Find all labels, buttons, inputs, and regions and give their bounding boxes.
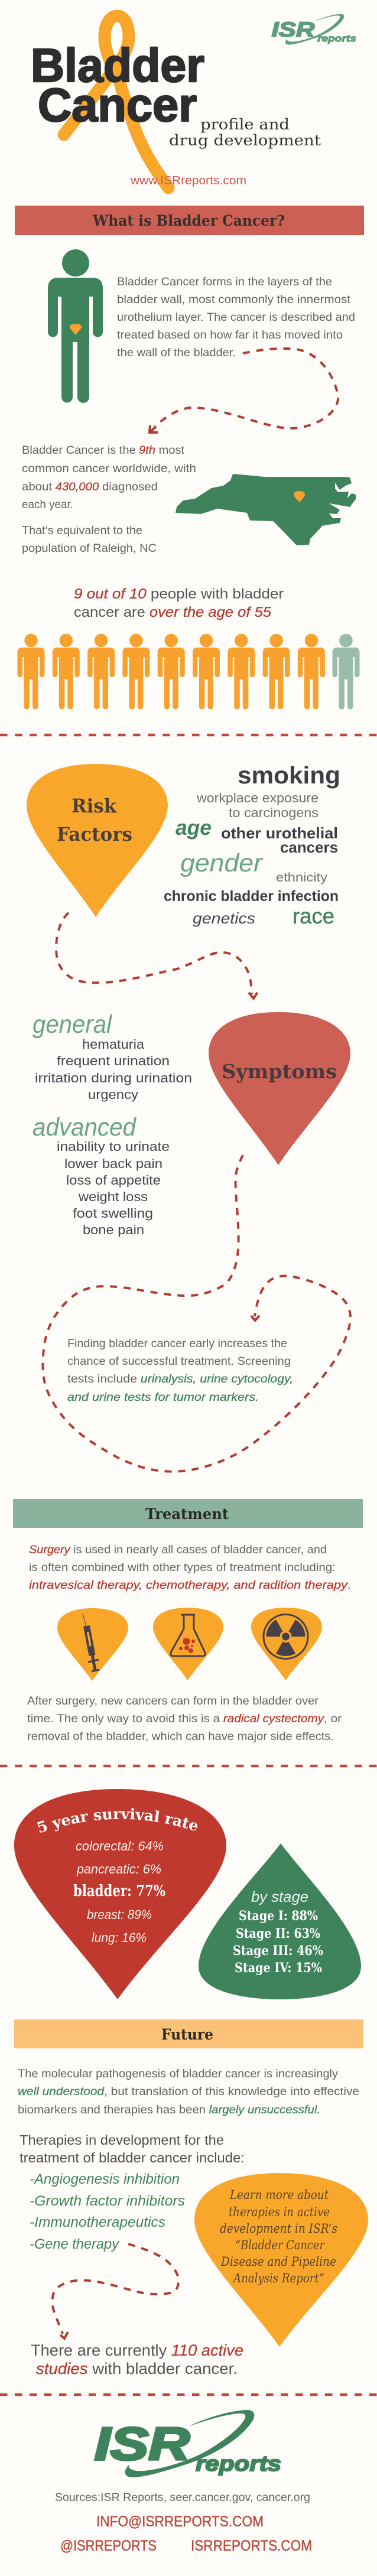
title: Cancer [38,79,197,131]
panel: survival by stage drop: Stage III: 46% [233,1943,323,1959]
text block: active studies: There are currently 110 active [31,2341,243,2359]
text block: molecular pathogenesis: well understood , but translation of this knowledge into effective [18,2085,359,2098]
text block: incidence: about 430,000 diagnosed [22,480,158,493]
arrow: therapies to active studies [53,2244,178,2338]
panel: risk factors pick [27,764,168,917]
panel: 5 year survival rate pick: lung: 16% [92,1930,147,1945]
panel: survival by stage drop: Stage I: 88% [239,1908,318,1924]
map: North Carolina with Raleigh pin [176,474,356,545]
contact links: INFO@ISRREPORTS.COM [96,2513,264,2530]
word cloud: risk factors: smoking [238,762,340,789]
text block: active studies [31,2341,243,2377]
contact links [60,2513,312,2554]
title: Bladder [31,39,204,92]
text block: screening: Finding bladder cancer early increases the [67,1337,287,1350]
word cloud: risk factors: gender [180,849,264,877]
text block: general symptoms: irritation during urination [35,1071,192,1085]
logo: ISR reports: ISR [271,18,315,41]
panel: 5 year survival rate pick: pancreatic: 6% [76,1862,161,1876]
text block: molecular pathogenesis: The molecular pathogenesis of bladder cancer is increasingly [18,2067,338,2080]
text block: general symptoms [32,1010,192,1102]
callout: learn more pick: development in ISR’s [220,2222,337,2236]
text block: therapies in development: -Angiogenesis inhibition [30,2171,180,2187]
text block: screening [67,1337,293,1404]
text block: definition: bladder wall, most commonly the innermost [117,293,351,306]
text block: incidence: Bladder Cancer is the 9th most [22,444,185,457]
icon: flask pick [153,1608,223,1680]
callout: learn more pick [194,2173,368,2347]
contact links: ISRREPORTS.COM [191,2538,312,2554]
subtitle: profile and [200,116,290,133]
logo: ISR reports: reports [317,34,356,44]
text block: surgery: intravesical therapy, chemotherapy, and radition therapy . [29,1579,351,1592]
text block: sources: Sources:ISR Reports, seer.cancer.gov, cancer.org [55,2491,310,2504]
text block: incidence [22,444,196,555]
text block: therapies in development: -Growth factor inhibitors [30,2193,185,2209]
panel: 5 year survival rate pick: 5 year survival rate [37,1808,197,1833]
arrow: symptoms looping to screening [43,1155,350,1472]
text block: surgery [29,1543,351,1592]
text block: surgery: Surgery is used in nearly all cases of bladder cancer, and [29,1543,327,1556]
text block: after surgery [27,1694,342,1743]
logo: ISR reports footer: ISR [95,2418,190,2470]
panel: survival by stage drop: by stage [251,1889,308,1905]
panel: what is bladder cancer banner [15,206,364,235]
panel: what is bladder cancer banner: What is Bladder Cancer? [92,212,285,229]
icon: awareness ribbon [64,16,168,188]
pictogram: 9 of 10 people [18,634,359,709]
callout: learn more pick: “Bladder Cancer [235,2238,326,2252]
panel: survival by stage drop: Stage IV: 15% [235,1960,322,1976]
text block: advanced symptoms: foot swelling [73,1206,153,1221]
text block: active studies: studies with bladder cancer. [36,2360,238,2377]
text block: definition: treated based on how far it has moved into [117,328,343,341]
word cloud: risk factors: workplace exposure [196,791,318,805]
text block: age statistic: 9 out of 10 people with bladder [74,586,284,602]
word cloud: risk factors: age [176,815,212,840]
text block: molecular pathogenesis: biomarkers and therapies has been largely unsuccessful. [18,2103,320,2116]
panel: 5 year survival rate pick [14,1789,226,1999]
contact links: @ISRREPORTS [60,2538,157,2554]
text block: incidence: common cancer worldwide, with [22,462,196,475]
text block: after surgery: time. The only way to avoid this is a radical cystectomy , or [27,1712,342,1725]
panel: treatment banner: Treatment [145,1505,229,1523]
text block: general symptoms: general [32,1010,112,1039]
icon: human figure with bladder [48,249,103,403]
panel: 5 year survival rate pick: breast: 89% [87,1907,152,1922]
text block: general symptoms: hematuria [82,1037,145,1052]
icon: radiation pick [251,1608,322,1680]
word cloud: risk factors: ethnicity [276,871,328,884]
callout: learn more pick: Analysis Report” [232,2271,324,2285]
text block: advanced symptoms: weight loss [78,1189,148,1204]
panel: survival by stage drop: Stage II: 63% [236,1926,320,1941]
word cloud: risk factors: race [292,904,334,928]
text block: therapies in development: treatment of bladder cancer include: [20,2150,245,2165]
title [31,39,204,131]
panel: header [31,14,356,188]
text block: age statistic: cancer are over the age of 55 [74,604,272,620]
callout: learn more pick: Learn more about [229,2188,329,2202]
text block: screening: and urine tests for tumor markers. [67,1391,259,1404]
text block: screening: tests include urinalysis, urine cytocology, [67,1372,293,1385]
website link: www.ISRreports.com [130,174,246,187]
arrow: dashed curve to incidence text [150,349,338,432]
text block: advanced symptoms: loss of appetite [66,1173,161,1188]
text block: after surgery: After surgery, new cancers can form in the bladder over [27,1694,319,1707]
panel: risk factors pick: Risk [72,795,117,817]
text block: incidence: population of Raleigh, NC [22,542,157,555]
panel: future banner [14,2019,363,2048]
panel: 5 year survival rate pick: colorectal: 64% [76,1839,164,1853]
text block: incidence: That’s equivalent to the [22,524,142,537]
text block: advanced symptoms: inability to urinate [57,1139,170,1154]
panel: risk factors pick: Factors [57,823,132,845]
text block: incidence: each year. [22,498,73,511]
subtitle [169,116,321,149]
panel: symptoms pick [209,1012,350,1165]
panel: 5 year survival rate pick: bladder: 77% [73,1882,165,1900]
word cloud: risk factors: genetics [193,909,255,927]
text block: therapies in development: Therapies in development for the [20,2132,224,2148]
text block: definition [117,275,355,359]
logo: ISR reports footer: reports [196,2451,281,2476]
text block: definition: the wall of the bladder. [117,346,236,359]
logo: ISR reports footer [95,2410,281,2477]
panel: future banner: Future [161,2026,213,2043]
text block: definition: Bladder Cancer forms in the layers of the [117,275,332,288]
text block: therapies in development: -Immunotherapeutics [30,2214,165,2230]
text block: definition: urothelium layer. The cancer is described and [117,311,355,324]
callout: learn more pick: Disease and Pipeline [220,2255,336,2269]
subtitle: drug development [169,132,321,149]
word cloud: risk factors: to carcinogens [229,805,318,820]
logo: ISR reports [271,14,356,44]
panel: symptoms pick: Symptoms [222,1060,337,1083]
text block: screening: chance of successful treatment. Screening [67,1355,291,1368]
text block: age statistic [74,586,284,620]
panel: survival by stage drop [199,1843,361,1999]
word cloud: risk factors [164,762,340,928]
text block: advanced symptoms: lower back pain [64,1156,162,1171]
text block: general symptoms: urgency [88,1087,138,1102]
text block: surgery: is often combined with other types of treatment including: [29,1561,336,1574]
word cloud: risk factors: other urothelial [221,824,338,842]
arrow: risk factors to symptoms [56,913,258,998]
text block: advanced symptoms: advanced [32,1113,137,1141]
icon: syringe pick [57,1608,128,1681]
text block: therapies in development: -Gene therapy [30,2236,120,2252]
text block: general symptoms: frequent urination [57,1053,170,1068]
word cloud: risk factors: cancers [280,838,338,856]
text block: after surgery: removal of the bladder, which can have major side effects. [27,1730,334,1743]
callout: learn more pick: therapies in active [229,2205,330,2219]
text block: therapies in development [20,2132,245,2252]
word cloud: risk factors: chronic bladder infection [164,888,339,905]
text block: molecular pathogenesis [18,2067,359,2116]
text block: advanced symptoms [32,1113,170,1237]
text block: advanced symptoms: bone pain [83,1222,144,1237]
panel: treatment banner [13,1499,363,1528]
